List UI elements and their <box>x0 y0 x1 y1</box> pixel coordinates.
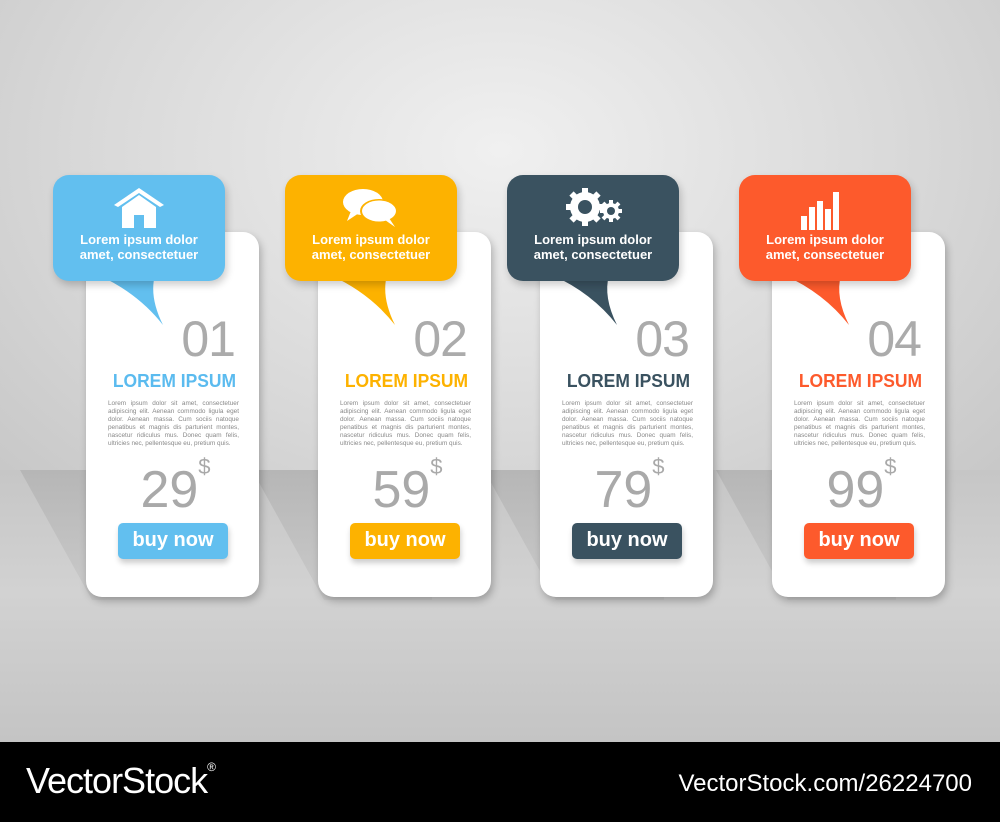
number: 02 <box>413 311 467 367</box>
bubble 3: amet, consectetuer <box>534 247 652 262</box>
button: buy now <box>818 529 900 551</box>
number: 03 <box>635 311 689 367</box>
bubble 1: amet, consectetuer <box>80 247 198 262</box>
button: buy now <box>586 529 668 551</box>
number: 01 <box>181 311 235 367</box>
logo text: VectorStock® <box>26 760 215 801</box>
price: 59$ <box>372 454 443 519</box>
text: Lorem ipsum dolor sit amet, consectetuer adipiscing elit. Aenean commodo ligula eget dolor. Aenean massa. Cum sociis natoque penatibus et magnis dis parturient montes, nascetur ridiculus mus. Donec quam felis, ultricies nec, pellentesque eu, pretium quis. <box>108 400 239 447</box>
button: buy now <box>132 529 214 551</box>
footer bar <box>0 742 1000 822</box>
bubble 4 <box>738 175 916 325</box>
price: 29$ <box>140 454 211 519</box>
text: Lorem ipsum dolor sit amet, consectetuer adipiscing elit. Aenean commodo ligula eget dolor. Aenean massa. Cum sociis natoque penatibus et magnis dis parturient montes, nascetur ridiculus mus. Donec quam felis, ultricies nec, pellentesque eu, pretium quis. <box>562 400 693 447</box>
bubble 1: Lorem ipsum dolor <box>80 232 198 247</box>
number: 04 <box>867 311 921 367</box>
bubble 3 <box>506 175 684 325</box>
price: 99$ <box>826 454 897 519</box>
icon: chat <box>343 189 396 227</box>
card 4 <box>772 232 945 597</box>
text: Lorem ipsum dolor sit amet, consectetuer adipiscing elit. Aenean commodo ligula eget dolor. Aenean massa. Cum sociis natoque penatibus et magnis dis parturient montes, nascetur ridiculus mus. Donec quam felis, ultricies nec, pellentesque eu, pretium quis. <box>794 400 925 447</box>
button <box>118 523 228 559</box>
bubble 2: amet, consectetuer <box>312 247 430 262</box>
bubble 2 <box>284 175 462 325</box>
card 2 <box>318 232 491 597</box>
heading: LOREM IPSUM <box>345 371 468 391</box>
button: buy now <box>364 529 446 551</box>
button <box>350 523 460 559</box>
card 1 <box>86 232 259 597</box>
card 3 <box>540 232 713 597</box>
icon: gears <box>566 188 622 226</box>
url text: VectorStock.com/26224700 <box>678 770 972 797</box>
text: Lorem ipsum dolor sit amet, consectetuer adipiscing elit. Aenean commodo ligula eget dolor. Aenean massa. Cum sociis natoque penatibus et magnis dis parturient montes, nascetur ridiculus mus. Donec quam felis, ultricies nec, pellentesque eu, pretium quis. <box>340 400 471 447</box>
heading: LOREM IPSUM <box>567 371 690 391</box>
heading: LOREM IPSUM <box>113 371 236 391</box>
button <box>572 523 682 559</box>
bubble 2: Lorem ipsum dolor <box>312 232 430 247</box>
price: 79$ <box>594 454 665 519</box>
button <box>804 523 914 559</box>
icon: house <box>114 188 164 228</box>
icon: bar chart <box>801 192 839 230</box>
heading: LOREM IPSUM <box>799 371 922 391</box>
bubble 3: Lorem ipsum dolor <box>534 232 652 247</box>
bubble 4: amet, consectetuer <box>766 247 884 262</box>
bubble 1 <box>52 175 230 325</box>
bubble 4: Lorem ipsum dolor <box>766 232 884 247</box>
